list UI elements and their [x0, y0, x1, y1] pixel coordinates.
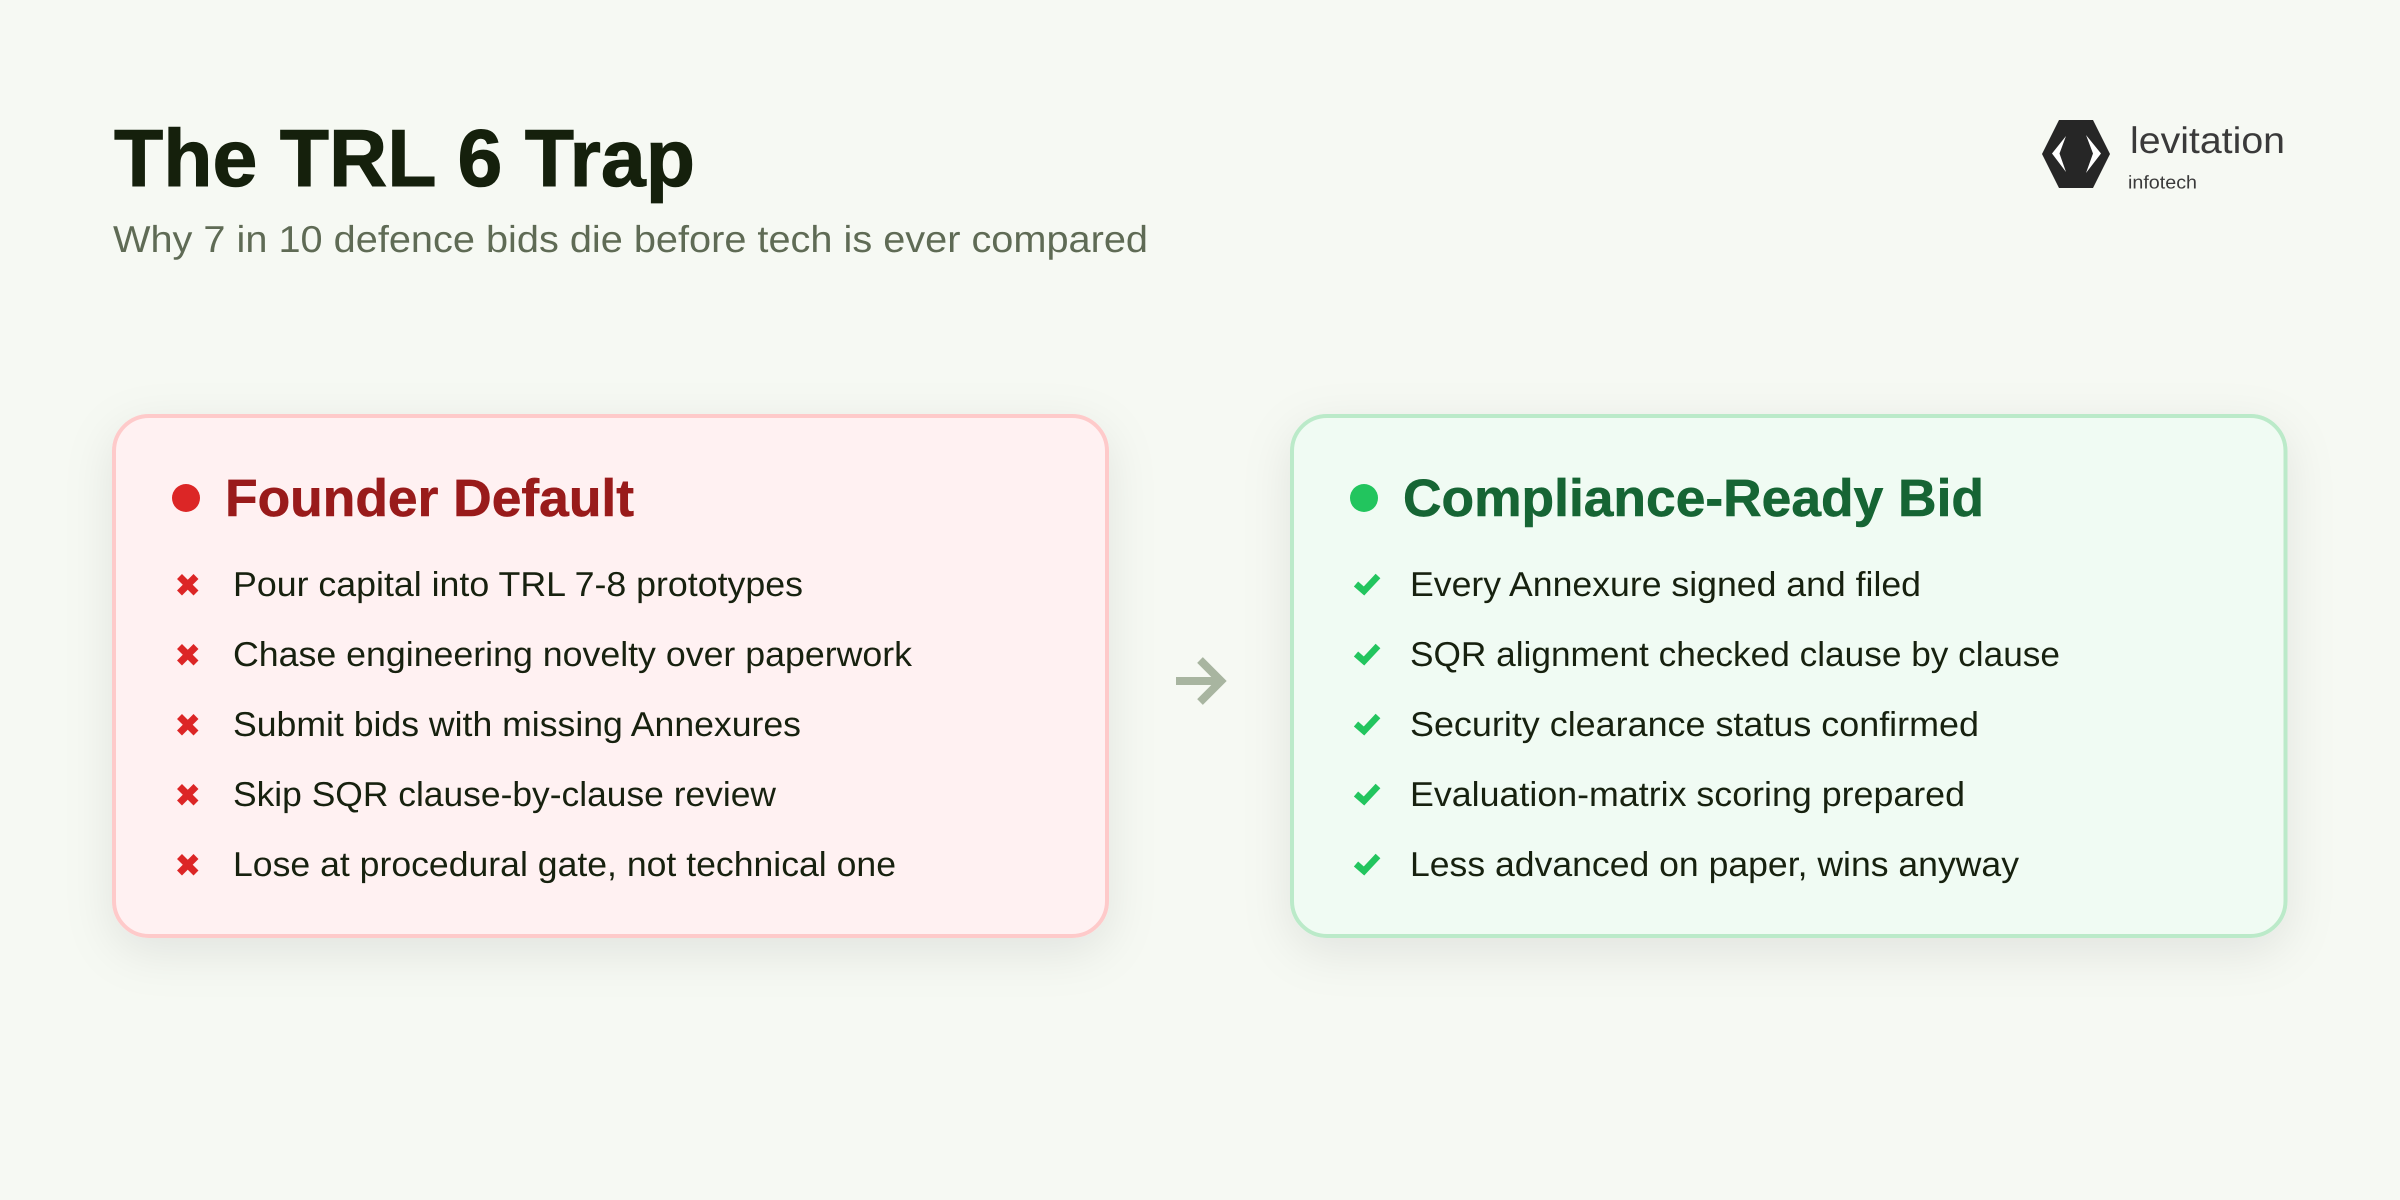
logo: levitation infotech: [2042, 120, 2285, 192]
title: The TRL 6 Trap: [114, 114, 695, 204]
item: less advanced: Less advanced on paper, wins anyway: [1410, 846, 2020, 884]
item: missing annexures: Submit bids with missing Annexures: [233, 706, 801, 744]
item: skip sqr review: Skip SQR clause-by-clause review: [233, 776, 776, 814]
icon: hexagon logo mark: [2042, 120, 2110, 188]
logo sub-wordmark: infotech: [2128, 172, 2197, 192]
panel background: [114, 416, 1107, 936]
status dot: green: [1350, 484, 1378, 512]
status dot: red: [172, 484, 200, 512]
panel background: [1292, 416, 2286, 936]
panel: founder default: [114, 416, 1107, 936]
item: evaluation matrix: Evaluation-matrix scoring prepared: [1410, 776, 1965, 814]
item: annexure signed: Every Annexure signed and filed: [1410, 566, 1921, 604]
item: lose at procedural gate: Lose at procedural gate, not technical one: [233, 846, 896, 884]
subtitle: Why 7 in 10 defence bids die before tech is ever compared: [113, 218, 1148, 260]
logo wordmark: levitation: [2130, 120, 2285, 161]
item: security clearance: Security clearance status confirmed: [1410, 706, 1979, 744]
heading: compliance-ready bid: Compliance-Ready Bid: [1403, 469, 1984, 528]
item: chase novelty: Chase engineering novelty over paperwork: [233, 636, 913, 674]
item: pour capital: Pour capital into TRL 7-8 prototypes: [233, 566, 803, 604]
item: sqr alignment: SQR alignment checked clause by clause: [1410, 636, 2060, 674]
panel: compliance-ready bid: [1292, 416, 2286, 936]
heading: founder default: Founder Default: [225, 469, 634, 528]
arrow: [1176, 660, 1221, 702]
